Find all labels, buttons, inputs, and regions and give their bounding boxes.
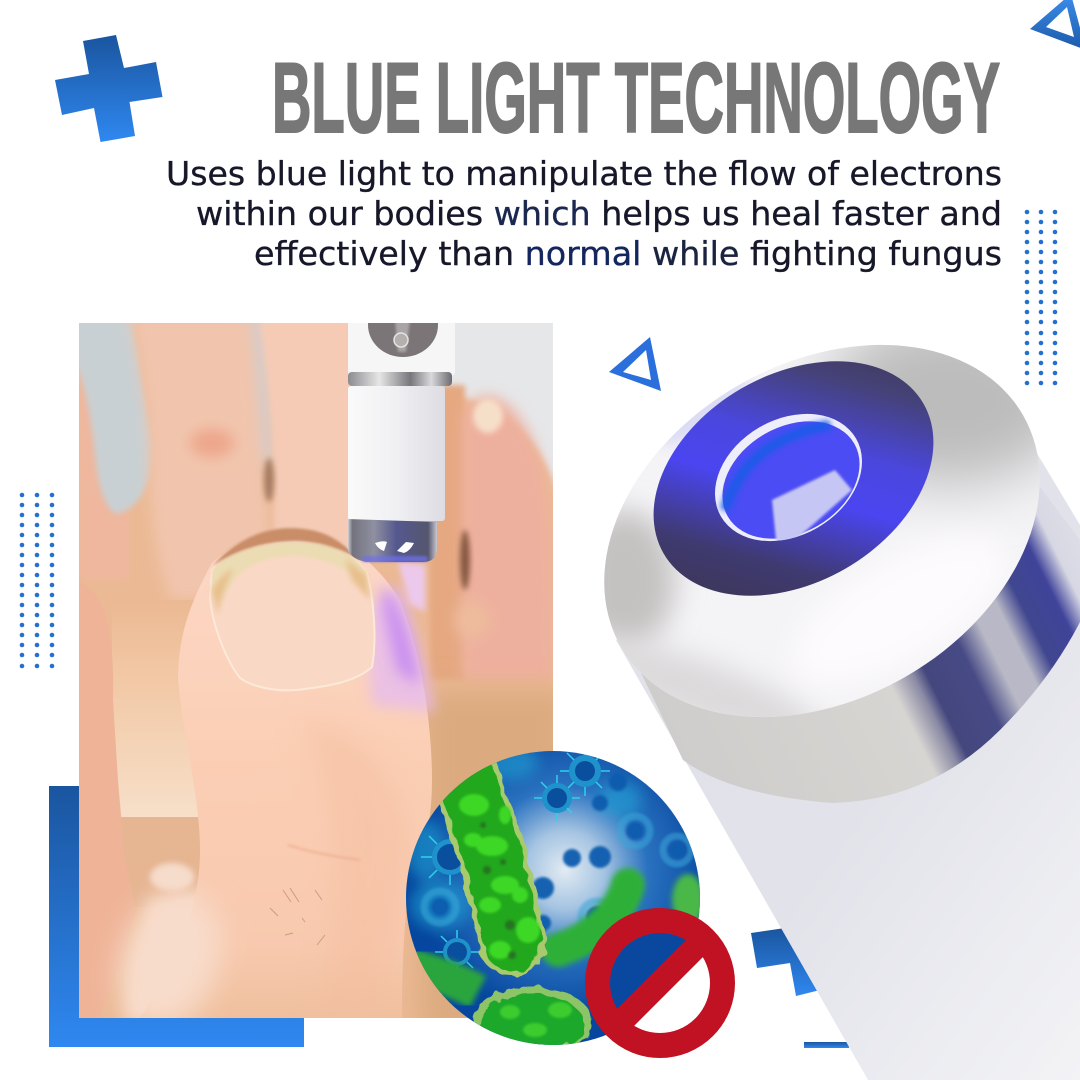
green bacteria back <box>558 885 628 950</box>
cuticle <box>213 528 360 566</box>
metal band <box>630 480 1080 803</box>
rod shadow spots <box>480 822 516 959</box>
icon: top right triangle <box>1030 0 1080 50</box>
device body <box>616 450 1080 1080</box>
middle triangle <box>609 337 661 391</box>
description text: effectively than normal while fighting fungus <box>254 234 1002 273</box>
panel: device close-up <box>604 344 1080 1080</box>
cap <box>604 344 1040 718</box>
panel: toe photo <box>79 323 553 1018</box>
lens <box>716 416 860 541</box>
dark blue ring <box>612 313 975 644</box>
blurred background toes <box>70 315 570 1040</box>
icon: prohibition sign <box>598 920 722 1046</box>
soft blue cells <box>431 773 685 931</box>
rod texture <box>459 794 540 959</box>
pale gap between toes <box>112 600 202 817</box>
blue backing square <box>49 786 304 1047</box>
lens rim <box>692 388 885 567</box>
description text <box>166 154 1002 273</box>
description text: Uses blue light to manipulate the flow of electrons <box>166 154 1002 193</box>
green blob bottom <box>472 984 592 1045</box>
nail yellow edge <box>211 542 368 591</box>
purple light glow <box>366 585 436 712</box>
dot grid: right <box>1025 210 1057 385</box>
cyan halo cells <box>424 816 691 933</box>
lower right blue shape <box>751 928 849 1048</box>
toe wrinkle <box>288 845 360 860</box>
panel: bacteria circle <box>406 751 700 1045</box>
blob texture <box>500 1002 572 1037</box>
green bacterium rod <box>462 768 512 942</box>
dot grid: left <box>20 493 54 668</box>
small toe <box>112 656 133 907</box>
big toe <box>140 528 432 1018</box>
toe hair <box>270 888 325 945</box>
cyan clouds <box>405 744 642 930</box>
spiked viruses <box>421 746 610 974</box>
toenail <box>210 542 374 690</box>
pen device <box>347 323 455 564</box>
pale skin blend <box>106 884 228 1018</box>
description text: within our bodies which helps us heal faster and <box>196 194 1002 233</box>
icon: medical cross <box>55 35 162 142</box>
